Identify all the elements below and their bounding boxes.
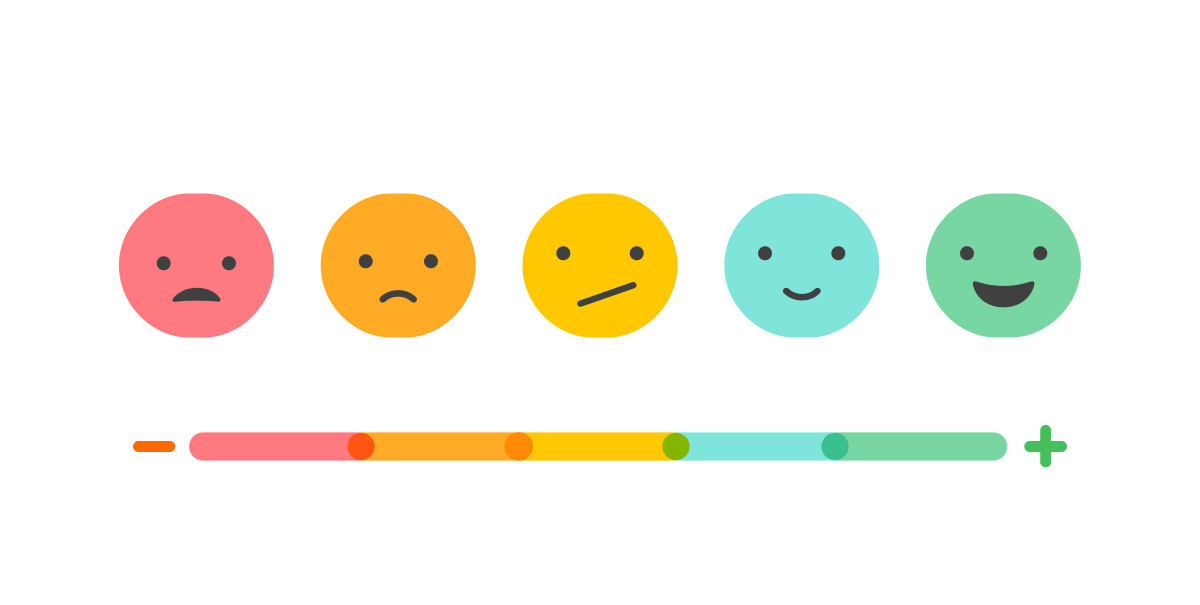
gradient scale bar bbox=[189, 432, 1007, 461]
icon: minus sign bbox=[133, 441, 175, 452]
icon: unhappy orange face bbox=[321, 194, 476, 338]
icon: neutral yellow face bbox=[522, 194, 678, 338]
icon: very unhappy red face bbox=[119, 194, 274, 338]
icon: happy teal face bbox=[724, 194, 879, 338]
icon: plus sign bbox=[1024, 425, 1067, 467]
icon: very happy green face bbox=[926, 194, 1081, 338]
